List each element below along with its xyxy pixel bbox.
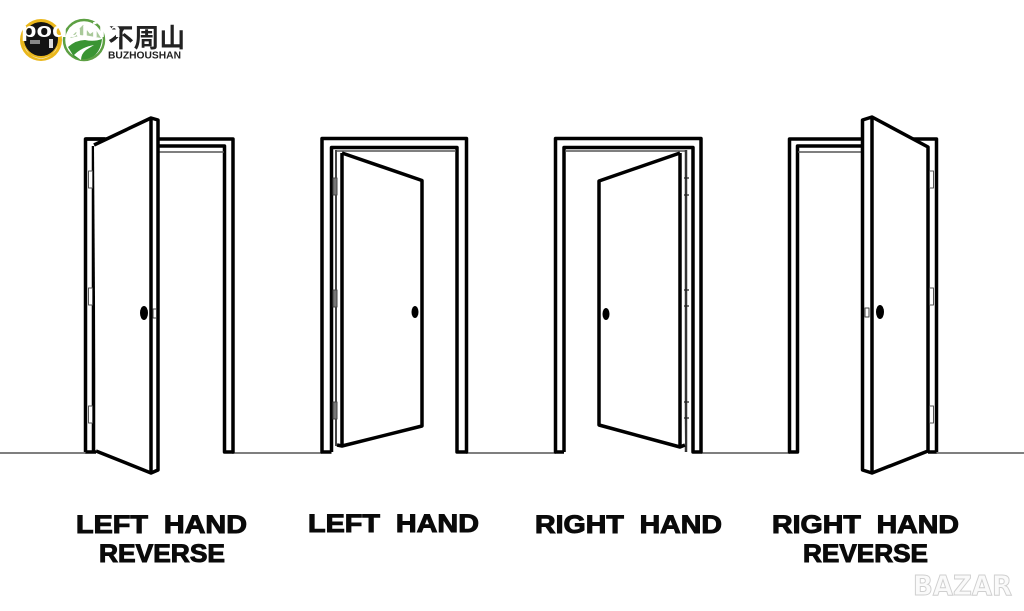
label: right hand reverse <box>772 511 959 568</box>
door frame <box>86 139 233 452</box>
label: left hand reverse: REVERSE <box>99 540 225 568</box>
latch plate <box>153 309 156 318</box>
door: left hand reverse <box>86 118 233 473</box>
hinges <box>930 171 934 423</box>
watermark: white overlay word: podarim <box>21 20 121 42</box>
logo: badge and Buzhoushan brand <box>20 19 185 62</box>
door knob <box>140 306 148 320</box>
door leaf <box>599 153 685 447</box>
floor line <box>0 452 1024 454</box>
door frame <box>790 139 936 452</box>
label: left hand reverse <box>76 511 247 568</box>
hinges <box>333 178 337 419</box>
latch plate <box>865 308 869 317</box>
door: left hand <box>322 138 466 452</box>
brand name in Chinese: 不周山 <box>108 23 185 53</box>
label: right hand reverse: REVERSE <box>803 540 928 568</box>
label: right hand: RIGHT HAND <box>535 511 722 539</box>
door leaf <box>862 117 928 473</box>
icon: yellow and black badge <box>20 19 62 61</box>
door frame <box>556 138 701 452</box>
door leaf <box>94 118 158 473</box>
door: right hand <box>556 138 701 452</box>
watermark: Bazar: BAZAR <box>913 569 1012 602</box>
door knob <box>602 308 610 320</box>
icon: green mountain circle <box>64 20 104 60</box>
door frame <box>322 138 466 452</box>
door knob <box>876 305 884 319</box>
brand name in Latin: BUZHOUSHAN <box>108 50 181 62</box>
door leaf <box>337 153 422 446</box>
hinges <box>88 171 92 423</box>
label: left hand reverse: LEFT HAND <box>76 511 247 539</box>
label: left hand: LEFT HAND <box>308 510 479 538</box>
door: right hand reverse <box>790 117 936 473</box>
label: right hand reverse: RIGHT HAND <box>772 511 959 539</box>
door knob <box>412 306 418 318</box>
hinges <box>684 178 689 418</box>
